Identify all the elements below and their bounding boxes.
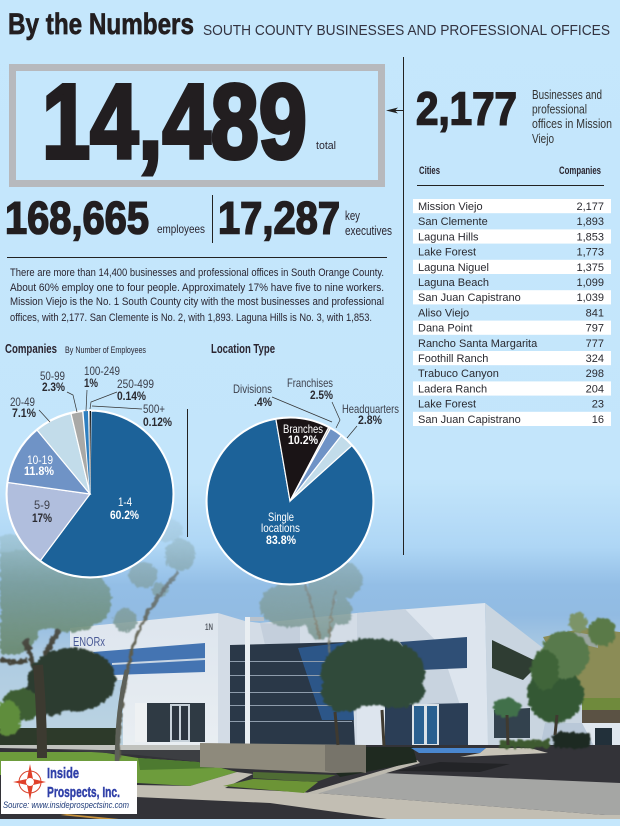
table: cities and companies	[413, 165, 611, 426]
table: cities and companies: 1,375	[576, 262, 604, 274]
table: cities and companies: Lake Forest	[418, 247, 476, 259]
table: cities and companies: San Juan Capistrano	[418, 292, 521, 304]
table: cities and companies: 797	[586, 323, 604, 335]
table: cities and companies: Rancho Santa Margarita	[418, 338, 538, 350]
logo: Inside Prospects, Inc.: Prospects, Inc.	[47, 784, 120, 801]
table: cities and companies: Trabuco Canyon	[418, 368, 499, 380]
text block: summary paragraph: About 60% employ one to four people. Approximately 17% have five to nine workers.	[10, 282, 384, 294]
trees	[0, 518, 616, 760]
text block: summary paragraph: Mission Viejo is the No. 1 South County city with the most businesses and professional	[10, 296, 384, 308]
leader lines	[272, 397, 357, 438]
slice labels: Branches	[283, 422, 323, 436]
text block: summary paragraph	[10, 267, 384, 324]
photo: office building and landscaping: 1N	[205, 622, 213, 632]
stat: key executives: 17,287	[218, 192, 340, 243]
table: cities and companies: San Clemente	[418, 216, 488, 228]
callout: Mission Viejo	[416, 82, 612, 146]
heading: Companies by number of employees	[5, 341, 146, 356]
table: cities and companies: Aliso Viejo	[418, 307, 469, 319]
sign and street number: ENORx	[73, 634, 105, 649]
slice labels: Franchises	[287, 376, 333, 390]
table: cities and companies: Cities	[419, 165, 440, 177]
table: cities and companies: 1,773	[576, 247, 604, 259]
table: cities and companies: 2,177	[576, 201, 604, 213]
title: By the Numbers	[8, 8, 194, 41]
table: cities and companies: Laguna Niguel	[418, 262, 489, 274]
slice labels: 7.1%	[12, 406, 36, 420]
leader lines	[39, 390, 142, 422]
slice labels: 17%	[32, 511, 52, 525]
slice labels: Single	[268, 510, 294, 524]
table: cities and companies: 1,039	[576, 292, 604, 304]
slice labels: 0.14%	[117, 389, 146, 403]
table: cities and companies: 23	[592, 399, 604, 411]
table: cities and companies: Foothill Ranch	[418, 353, 488, 365]
table: cities and companies: 1,853	[576, 231, 604, 243]
slice labels: 20-49	[10, 395, 35, 409]
table: cities and companies: San Juan Capistrano	[418, 414, 521, 426]
stat: employees: 168,665	[5, 192, 149, 243]
logo: Inside Prospects, Inc.: Source: www.insideprospectsinc.com	[3, 800, 129, 810]
slice labels: 100-249	[84, 364, 120, 378]
slice labels: locations	[261, 521, 300, 535]
table: cities and companies: 777	[586, 338, 604, 350]
callout: Mission Viejo: professional	[532, 102, 587, 116]
table: cities and companies: 841	[586, 307, 604, 319]
slice labels: 83.8%	[266, 533, 296, 547]
table: cities and companies: 1,893	[576, 216, 604, 228]
title	[8, 8, 610, 41]
title: SOUTH COUNTY BUSINESSES AND PROFESSIONAL OFFICES	[203, 23, 610, 39]
table: cities and companies: Lake Forest	[418, 399, 476, 411]
table: cities and companies: Dana Point	[418, 323, 472, 335]
slice labels: 10.2%	[288, 433, 318, 447]
table: cities and companies: 324	[586, 353, 604, 365]
text block: summary paragraph: offices, with 2,177. San Clemente is No. 2, with 1,893. Laguna Hills is No. 3, with 1,853.	[10, 312, 372, 324]
photo: office building and landscaping	[0, 518, 620, 819]
right building block	[357, 603, 488, 746]
logo: Inside Prospects, Inc.: Inside	[47, 765, 79, 782]
callout: total businesses: 14,489	[42, 63, 307, 181]
slice labels: 2.3%	[42, 380, 65, 394]
heading: Companies by number of employees: By Number of Employees	[65, 345, 146, 356]
table: cities and companies: 298	[586, 368, 604, 380]
text block: summary paragraph: There are more than 14,400 businesses and professional offices in South Orange County.	[10, 267, 384, 279]
table: cities and companies: Mission Viejo	[418, 201, 483, 213]
arrow	[386, 108, 403, 114]
slice labels: .4%	[254, 395, 272, 409]
callout: Mission Viejo: 2,177	[416, 82, 517, 134]
slice labels: 50-99	[40, 369, 65, 383]
slice labels: 1%	[84, 376, 98, 390]
table: cities and companies: Ladera Ranch	[418, 383, 487, 395]
slice labels: 500+	[143, 402, 165, 416]
slice labels: Divisions	[233, 382, 272, 396]
left building block	[70, 613, 218, 745]
slice labels: 250-499	[117, 377, 154, 391]
table: cities and companies: Laguna Beach	[418, 277, 489, 289]
slice labels: 2.5%	[310, 388, 333, 402]
slice labels: 5-9	[34, 498, 50, 512]
slice labels: 10-19	[27, 453, 53, 467]
slice labels	[233, 376, 399, 547]
callout: total businesses: total	[316, 140, 336, 152]
pie chart: companies by employees	[6, 364, 174, 578]
table: cities and companies: Companies	[559, 165, 601, 177]
slice labels: 11.8%	[24, 464, 54, 478]
callout: Mission Viejo: Viejo	[532, 132, 554, 146]
stat: key executives: executives	[345, 224, 392, 238]
slice labels: 1-4	[118, 495, 132, 509]
background hill	[543, 628, 620, 712]
central recess	[218, 613, 357, 745]
callout: Mission Viejo: Businesses and	[532, 88, 602, 102]
logo: Inside Prospects, Inc.	[1, 761, 137, 814]
slice labels: 0.12%	[143, 415, 172, 429]
ground	[0, 745, 620, 819]
table: cities and companies: 204	[586, 383, 604, 395]
shrubs	[0, 728, 118, 745]
table: cities and companies: Laguna Hills	[418, 231, 479, 243]
table: cities and companies: 1,099	[576, 277, 604, 289]
slice labels: 2.8%	[358, 413, 382, 427]
heading: Companies by number of employees: Companies	[5, 341, 57, 356]
table: cities and companies: 16	[592, 414, 604, 426]
stat: employees: employees	[157, 222, 205, 236]
stat: key executives: key	[345, 209, 361, 223]
slice labels	[10, 364, 172, 525]
icon: compass star	[13, 764, 46, 800]
slice labels: 60.2%	[110, 508, 139, 522]
slice labels: Headquarters	[342, 402, 399, 416]
pie chart: location type	[206, 376, 399, 586]
heading: Location Type: Location Type	[211, 341, 275, 356]
